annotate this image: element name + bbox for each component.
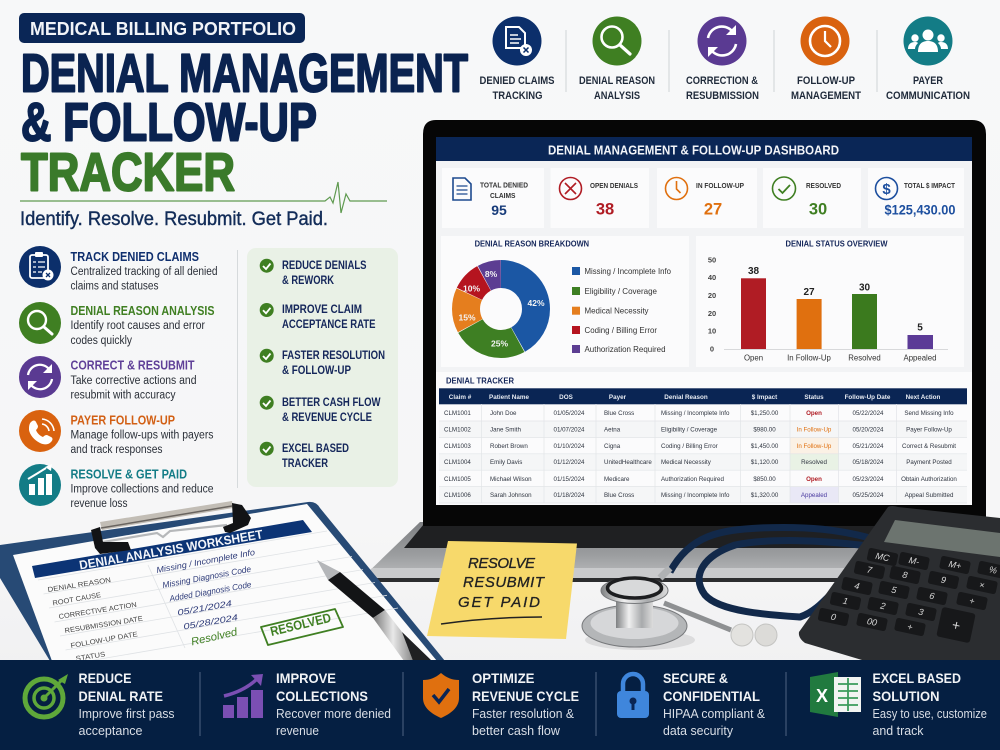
kpi: open denials: 38 bbox=[596, 200, 614, 218]
bar chart: 20 bbox=[708, 291, 716, 300]
item: correct and resubmit: CORRECT & RESUBMIT bbox=[70, 358, 195, 372]
bar chart: Appealed bbox=[904, 354, 936, 363]
table rows: Jane Smith bbox=[490, 426, 522, 434]
table rows: John Doe bbox=[490, 410, 517, 417]
panel: benefits checklist: IMPROVE CLAIM bbox=[282, 304, 362, 316]
bar chart: Open bbox=[744, 354, 763, 363]
dashboard header: DENIAL MANAGEMENT & FOLLOW-UP DASHBOARD bbox=[548, 144, 839, 158]
table rows: Robert Brown bbox=[490, 443, 528, 450]
kpi: total denied claims bbox=[442, 168, 544, 228]
worksheet handwritten values: 05/28/2024 bbox=[183, 612, 239, 631]
kpi: total denied claims: TOTAL DENIED bbox=[480, 180, 529, 190]
benefit: excel based solution: EXCEL BASED bbox=[872, 670, 961, 686]
table rows: Resolved bbox=[801, 459, 827, 466]
table rows: 05/21/2024 bbox=[853, 443, 884, 450]
benefit: secure and confidential: HIPAA compliant & bbox=[663, 707, 766, 721]
item: payer follow-up bbox=[19, 410, 214, 456]
worksheet header: DENIAL ANALYSIS WORKSHEET bbox=[78, 527, 264, 572]
kpi: in follow-up bbox=[657, 168, 757, 228]
benefit: optimize revenue cycle: Faster resolution & bbox=[472, 707, 575, 721]
left feature list bbox=[19, 246, 218, 510]
table rows: Blue Cross bbox=[604, 492, 634, 499]
item: denial reason analysis: DENIAL REASON ANALYSIS bbox=[70, 304, 214, 318]
panel: benefits checklist: & REVENUE CYCLE bbox=[282, 412, 372, 424]
feature: payer communication: COMMUNICATION bbox=[886, 90, 970, 102]
kpi: total impact bbox=[868, 168, 964, 228]
title: DENIAL MANAGEMENT bbox=[21, 44, 468, 104]
kpi: total impact: TOTAL $ IMPACT bbox=[904, 181, 955, 190]
donut chart: 10% bbox=[463, 284, 480, 294]
benefit: optimize revenue cycle: REVENUE CYCLE bbox=[472, 688, 579, 704]
table rows: Missing / Incomplete Info bbox=[661, 410, 730, 417]
feature: correction and resubmission bbox=[686, 16, 759, 102]
table rows: Open bbox=[806, 476, 822, 483]
worksheet header bbox=[32, 520, 312, 578]
table rows: Emily Davis bbox=[490, 459, 522, 466]
benefit: secure and confidential: data security bbox=[663, 724, 734, 738]
table header bbox=[449, 394, 941, 401]
calculator keys: 00 bbox=[866, 616, 878, 628]
table rows: CLM1003 bbox=[444, 443, 471, 450]
table rows: CLM1004 bbox=[444, 459, 471, 466]
calculator keys: 6 bbox=[929, 591, 935, 601]
bar chart: 27 bbox=[803, 287, 815, 298]
panel: benefits checklist: & REWORK bbox=[282, 275, 335, 287]
calculator keys: × bbox=[978, 580, 986, 590]
sticky note: RESOLVE bbox=[468, 555, 536, 572]
table rows: Open bbox=[806, 410, 822, 417]
table rows: In Follow-Up bbox=[797, 426, 832, 434]
bar chart: Resolved bbox=[848, 354, 881, 363]
benefit: excel based solution bbox=[810, 670, 987, 738]
dashboard header bbox=[436, 137, 972, 161]
panel: denial status overview: DENIAL STATUS OVERVIEW bbox=[786, 239, 888, 249]
table rows: In Follow-Up bbox=[797, 443, 832, 450]
panel: benefits checklist: TRACKER bbox=[282, 458, 329, 470]
item: track denied claims: claims and statuses bbox=[70, 280, 159, 292]
tagline: Identify. Resolve. Resubmit. Get Paid. bbox=[20, 209, 328, 230]
table rows: Obtain Authorization bbox=[901, 476, 957, 483]
panel: denial reason breakdown: DENIAL REASON BREAKDOWN bbox=[475, 239, 589, 249]
benefit: reduce denial rate: Improve first pass bbox=[78, 707, 174, 721]
kpi: open denials bbox=[550, 168, 649, 228]
item: denial reason analysis bbox=[19, 302, 214, 347]
feature: denial reason analysis bbox=[579, 16, 655, 102]
badge: medical billing portfolio bbox=[19, 13, 305, 43]
benefit: optimize revenue cycle bbox=[423, 670, 579, 738]
benefit: reduce denial rate: REDUCE bbox=[78, 670, 132, 686]
table rows: 01/07/2024 bbox=[554, 426, 585, 434]
dashboard screen bbox=[436, 137, 972, 505]
calculator bbox=[799, 506, 1000, 660]
legend: Medical Necessity bbox=[584, 306, 649, 316]
item: resolve and get paid: revenue loss bbox=[70, 498, 128, 510]
feature: denial reason analysis: ANALYSIS bbox=[594, 90, 640, 102]
table rows: Coding / Billing Error bbox=[661, 443, 718, 450]
item: correct and resubmit bbox=[19, 356, 196, 402]
table rows: 01/10/2024 bbox=[554, 443, 585, 450]
feature: follow-up management: MANAGEMENT bbox=[791, 90, 861, 102]
table rows: $1,320.00 bbox=[751, 492, 779, 499]
pen bbox=[317, 560, 432, 661]
calculator keys: 7 bbox=[866, 565, 874, 576]
benefit: improve collections: COLLECTIONS bbox=[276, 688, 368, 704]
table rows: 05/25/2024 bbox=[853, 492, 884, 499]
benefit: improve collections: revenue bbox=[276, 724, 319, 738]
calculator keys: + bbox=[906, 622, 914, 632]
worksheet labels: STATUS bbox=[75, 651, 106, 663]
table rows: 05/23/2024 bbox=[853, 476, 884, 483]
benefit: optimize revenue cycle: OPTIMIZE bbox=[472, 670, 534, 686]
table rows: Cigna bbox=[604, 443, 621, 450]
calculator keys: 4 bbox=[854, 581, 860, 591]
worksheet handwritten values: Added Diagnosis Code bbox=[168, 579, 252, 604]
table rows: 05/18/2024 bbox=[853, 459, 884, 466]
table rows: 01/18/2024 bbox=[554, 492, 585, 499]
table rows: Appealed bbox=[801, 492, 828, 499]
table header: DOS bbox=[559, 394, 573, 401]
item: denial reason analysis: codes quickly bbox=[70, 335, 132, 347]
panel: benefits checklist: EXCEL BASED bbox=[282, 443, 349, 455]
table header: $ Impact bbox=[752, 394, 778, 401]
table rows: Missing / Incomplete Info bbox=[661, 492, 730, 499]
title: TRACKER bbox=[21, 142, 235, 202]
table rows: Medicare bbox=[604, 476, 630, 483]
calculator keys: MC bbox=[875, 551, 891, 563]
table rows: $850.00 bbox=[753, 476, 776, 483]
benefit: secure and confidential bbox=[617, 670, 766, 738]
bar chart: In Follow-Up bbox=[787, 354, 832, 363]
legend: Missing / Incomplete Info bbox=[584, 266, 671, 276]
table rows: UnitedHealthcare bbox=[604, 459, 652, 466]
table rows: Eligibility / Coverage bbox=[661, 426, 718, 434]
clipboard clip bbox=[91, 501, 251, 554]
title: & FOLLOW-UP bbox=[21, 92, 317, 152]
kpi: total denied claims: 95 bbox=[491, 202, 507, 218]
calculator keys: 8 bbox=[902, 570, 908, 580]
kpi: in follow-up: IN FOLLOW-UP bbox=[696, 181, 744, 190]
panel: benefits checklist: ACCEPTANCE RATE bbox=[282, 319, 376, 331]
benefit: reduce denial rate bbox=[25, 670, 174, 738]
sticky note: RESUBMIT bbox=[463, 574, 546, 591]
calculator keys: + bbox=[968, 596, 976, 606]
table rows: CLM1002 bbox=[444, 426, 471, 434]
kpi: total denied claims: CLAIMS bbox=[490, 191, 516, 200]
calculator keys: 1 bbox=[842, 596, 849, 606]
table rows: Payment Posted bbox=[906, 459, 952, 466]
item: payer follow-up: PAYER FOLLOW-UP bbox=[70, 414, 175, 428]
bar chart: 0 bbox=[710, 344, 714, 354]
benefit: optimize revenue cycle: better cash flow bbox=[472, 724, 561, 738]
worksheet paper bbox=[13, 504, 437, 661]
laptop base bbox=[362, 522, 1000, 582]
item: correct and resubmit: Take corrective actions and bbox=[70, 375, 196, 387]
worksheet labels: DENIAL REASON bbox=[47, 577, 112, 594]
item: payer follow-up: Manage follow-ups with payers bbox=[70, 430, 214, 442]
table rows: 01/05/2024 bbox=[554, 410, 585, 417]
item: track denied claims: TRACK DENIED CLAIMS bbox=[70, 250, 199, 264]
calculator keys: 2 bbox=[879, 600, 886, 611]
kpi: total impact: $125,430.00 bbox=[884, 202, 956, 218]
bar chart bbox=[708, 256, 948, 363]
sticky note: GET PAID bbox=[458, 594, 540, 611]
calculator keys: % bbox=[988, 564, 998, 576]
feature: payer communication: PAYER bbox=[913, 75, 943, 87]
badge: medical billing portfolio: MEDICAL BILLING PORTFOLIO bbox=[30, 19, 296, 39]
item: resolve and get paid: RESOLVE & GET PAID bbox=[70, 468, 187, 482]
feature: follow-up management: FOLLOW-UP bbox=[797, 75, 855, 87]
benefit: excel based solution: SOLUTION bbox=[872, 688, 940, 704]
table header: Status bbox=[804, 394, 824, 401]
heartbeat line bbox=[20, 182, 387, 213]
worksheet handwritten values: Missing Diagnosis Code bbox=[162, 564, 252, 590]
feature: denial reason analysis: DENIAL REASON bbox=[579, 75, 655, 87]
worksheet handwritten values: 05/21/2024 bbox=[177, 598, 233, 617]
bar chart: 10 bbox=[708, 326, 716, 336]
panel: benefits checklist: & FOLLOW-UP bbox=[282, 365, 351, 377]
calculator keys: M- bbox=[908, 555, 920, 567]
table rows: Michael Wilson bbox=[490, 476, 532, 483]
benefit: reduce denial rate: DENIAL RATE bbox=[78, 688, 163, 704]
item: track denied claims bbox=[19, 246, 218, 292]
benefit: secure and confidential: CONFIDENTIAL bbox=[663, 688, 760, 704]
calculator keys: 0 bbox=[830, 612, 837, 622]
feature: correction and resubmission: CORRECTION & bbox=[686, 75, 758, 87]
table rows: 05/22/2024 bbox=[853, 410, 884, 417]
legend: Authorization Required bbox=[584, 344, 666, 354]
calculator keys: 5 bbox=[891, 585, 898, 596]
panel: benefits checklist: REDUCE DENIALS bbox=[282, 260, 367, 272]
benefit: secure and confidential: SECURE & bbox=[663, 670, 728, 686]
worksheet labels: FOLLOW-UP DATE bbox=[70, 631, 139, 650]
legend bbox=[572, 266, 671, 354]
bar chart: 20 bbox=[708, 309, 716, 318]
bar chart: 38 bbox=[748, 266, 759, 277]
laptop bbox=[362, 120, 1000, 582]
denial tracker table: DENIAL TRACKER bbox=[446, 375, 514, 385]
benefit: improve collections bbox=[223, 670, 391, 738]
item: track denied claims: Centralized tracking of all denied bbox=[70, 266, 218, 278]
table header: Patient Name bbox=[489, 394, 529, 401]
bar chart: 40 bbox=[708, 273, 716, 282]
table rows: $980.00 bbox=[753, 426, 776, 434]
table rows: CLM1005 bbox=[444, 476, 471, 483]
bottom benefits bar bbox=[0, 660, 1000, 750]
table rows: $1,250.00 bbox=[751, 410, 779, 417]
table rows: Sarah Johnson bbox=[490, 492, 532, 499]
feature: denied claims tracking: DENIED CLAIMS bbox=[480, 75, 554, 87]
table rows: Appeal Submitted bbox=[905, 492, 954, 499]
kpi: open denials: OPEN DENIALS bbox=[590, 181, 638, 190]
feature: payer communication bbox=[886, 16, 970, 102]
sticky note bbox=[427, 541, 577, 639]
denial tracker table bbox=[436, 372, 972, 505]
legend: Coding / Billing Error bbox=[584, 325, 657, 335]
benefit: improve collections: IMPROVE bbox=[276, 670, 336, 686]
worksheet labels: ROOT CAUSE bbox=[52, 592, 102, 607]
benefit: excel based solution: Easy to use, customize bbox=[872, 707, 987, 721]
calculator keys: M+ bbox=[948, 559, 962, 571]
table rows: Authorization Required bbox=[661, 476, 725, 483]
kpi: in follow-up: 27 bbox=[704, 200, 722, 218]
panel: benefits checklist: BETTER CASH FLOW bbox=[282, 397, 381, 409]
calculator keys: 3 bbox=[918, 607, 924, 617]
table header: Follow-Up Date bbox=[845, 394, 891, 401]
worksheet handwritten values: Resolved bbox=[190, 626, 239, 648]
donut chart: 25% bbox=[491, 338, 508, 348]
table rows: $1,120.00 bbox=[751, 459, 779, 466]
title bbox=[21, 44, 468, 202]
table rows: CLM1006 bbox=[444, 492, 471, 499]
calculator keys: 9 bbox=[940, 575, 947, 585]
table rows: 01/15/2024 bbox=[554, 476, 585, 483]
benefit: excel based solution: X bbox=[816, 686, 828, 706]
worksheet handwritten values: Missing / Incomplete Info bbox=[156, 547, 256, 575]
table rows: Send Missing Info bbox=[904, 410, 954, 417]
donut chart: 8% bbox=[485, 269, 498, 279]
item: denial reason analysis: Identify root causes and error bbox=[70, 320, 205, 332]
resolved stamp: RESOLVED bbox=[269, 610, 332, 639]
benefit: improve collections: Recover more denied bbox=[276, 707, 391, 721]
stethoscope bbox=[582, 527, 870, 650]
feature: denied claims tracking bbox=[480, 16, 554, 102]
table rows: Correct & Resubmit bbox=[902, 443, 956, 450]
kpi: resolved: RESOLVED bbox=[806, 181, 841, 190]
clipboard worksheet bbox=[0, 501, 445, 664]
calculator display bbox=[884, 520, 1000, 557]
table rows: 01/12/2024 bbox=[554, 459, 585, 466]
worksheet labels: CORRECTIVE ACTION bbox=[58, 602, 137, 621]
table header: Claim # bbox=[449, 394, 472, 401]
donut chart: 15% bbox=[458, 312, 476, 322]
table rows: Payer Follow-Up bbox=[906, 426, 952, 434]
bar chart: 50 bbox=[708, 256, 716, 264]
table rows: Blue Cross bbox=[604, 410, 634, 417]
table header: Next Action bbox=[906, 394, 941, 401]
clipboard board bbox=[0, 502, 445, 661]
top feature row bbox=[480, 16, 970, 102]
item: resolve and get paid: Improve collections and reduce bbox=[70, 484, 214, 496]
item: payer follow-up: and track responses bbox=[70, 444, 163, 456]
item: resolve and get paid bbox=[19, 464, 214, 510]
table rows: Medical Necessity bbox=[661, 459, 712, 466]
calculator keys: + bbox=[950, 616, 962, 634]
worksheet labels: RESUBMISSION DATE bbox=[64, 616, 144, 635]
feature: follow-up management bbox=[791, 16, 861, 102]
worksheet handwritten values bbox=[156, 547, 256, 648]
item: correct and resubmit: resubmit with accuracy bbox=[70, 390, 176, 402]
donut chart bbox=[458, 269, 545, 348]
table rows: CLM1001 bbox=[444, 410, 471, 417]
table rows: 05/20/2024 bbox=[853, 426, 884, 434]
table rows: Aetna bbox=[604, 426, 621, 434]
table header: Payer bbox=[609, 394, 627, 401]
bar chart: 5 bbox=[917, 323, 923, 334]
panel: denial status overview bbox=[696, 236, 964, 367]
laptop bezel bbox=[423, 120, 986, 526]
calculator keys bbox=[817, 548, 1000, 643]
kpi: total impact: $ bbox=[882, 181, 891, 198]
table rows bbox=[444, 410, 957, 499]
kpi: resolved: 30 bbox=[809, 200, 827, 218]
legend: Eligibility / Coverage bbox=[584, 286, 657, 296]
worksheet labels bbox=[47, 577, 144, 663]
donut chart: 42% bbox=[527, 298, 545, 308]
panel: benefits checklist bbox=[247, 248, 398, 487]
feature: denied claims tracking: TRACKING bbox=[492, 90, 542, 102]
benefit: excel based solution: and track bbox=[872, 724, 924, 738]
feature: correction and resubmission: RESUBMISSION bbox=[686, 90, 759, 102]
kpi: resolved bbox=[763, 168, 861, 228]
bar chart: 30 bbox=[859, 282, 870, 293]
table header: Denial Reason bbox=[664, 394, 708, 401]
table rows: $1,450.00 bbox=[751, 443, 779, 450]
benefit: reduce denial rate: acceptance bbox=[78, 724, 143, 738]
panel: denial reason breakdown bbox=[441, 236, 689, 367]
panel: benefits checklist: FASTER RESOLUTION bbox=[282, 350, 385, 362]
